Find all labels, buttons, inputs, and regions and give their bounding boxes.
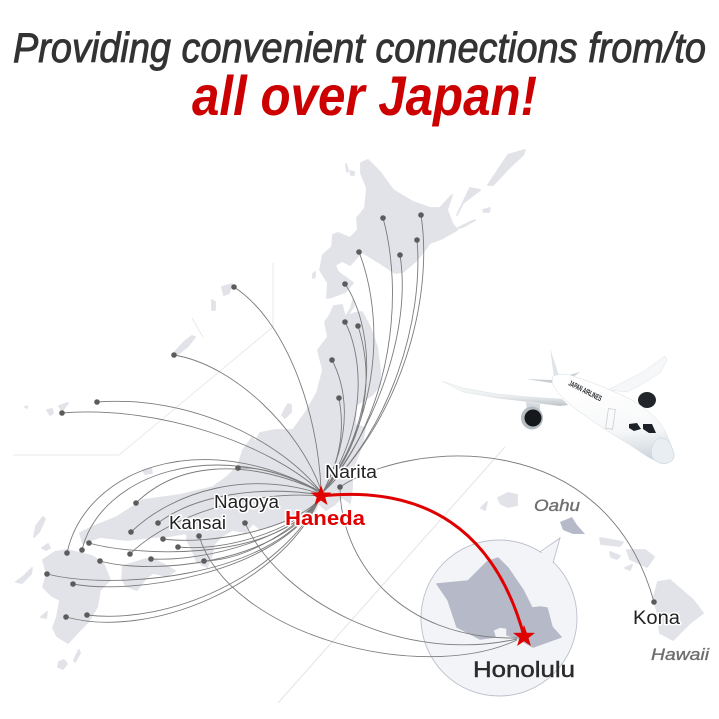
Kyushu bbox=[43, 550, 110, 643]
vertical tail bbox=[550, 348, 559, 378]
Kauai bbox=[498, 493, 517, 507]
label: Kansai: Kansai bbox=[169, 513, 226, 533]
nose cone bbox=[651, 438, 674, 464]
fuselage bbox=[552, 374, 674, 464]
airplane bbox=[442, 348, 674, 464]
Niihau bbox=[481, 502, 487, 510]
Kuril islands bbox=[456, 150, 525, 229]
far engine bbox=[638, 392, 656, 408]
near wing bbox=[442, 381, 568, 406]
far wing bbox=[608, 356, 667, 392]
small islands bbox=[16, 272, 315, 669]
door bbox=[606, 409, 615, 429]
label: Oahu: Oahu bbox=[534, 497, 580, 515]
Honshu bbox=[80, 300, 380, 567]
label: Honolulu: Honolulu bbox=[473, 657, 575, 682]
title bbox=[13, 24, 706, 127]
near engine bbox=[521, 406, 543, 430]
route arcs bbox=[47, 215, 654, 657]
star: Honolulu bbox=[513, 625, 535, 646]
Rishiri and Rebun bbox=[346, 164, 354, 175]
engine pylon bbox=[526, 402, 540, 412]
engine intake bbox=[524, 410, 542, 426]
Big Island bbox=[653, 580, 703, 640]
Shikoku bbox=[122, 558, 175, 590]
Lanai bbox=[610, 552, 620, 559]
map: Japan bbox=[16, 150, 525, 669]
title line 2: all over Japan! bbox=[192, 64, 537, 127]
horizontal stabilizers bbox=[526, 372, 580, 383]
Hokkaido bbox=[320, 160, 457, 298]
cockpit windows bbox=[629, 423, 656, 433]
Molokai bbox=[600, 538, 623, 546]
labels bbox=[169, 462, 711, 682]
Oahu enlarged bbox=[437, 558, 561, 647]
label: Haneda: Haneda bbox=[285, 507, 366, 530]
Oahu callout bubble bbox=[421, 538, 577, 696]
Maui bbox=[627, 550, 654, 567]
Oahu small island bbox=[560, 517, 585, 534]
label: Nagoya: Nagoya bbox=[214, 492, 280, 512]
map: Hawaiian islands bbox=[481, 493, 703, 640]
label: Kona: Kona bbox=[633, 608, 680, 629]
label: Narita: Narita bbox=[325, 462, 378, 482]
airport dots bbox=[44, 212, 657, 620]
label: Hawaii: Hawaii bbox=[651, 646, 711, 664]
Kahoolawe bbox=[625, 565, 632, 570]
Haneda to Honolulu red route bbox=[321, 494, 524, 636]
star: Haneda bbox=[310, 485, 332, 505]
airline name: JAPAN AIRLINES bbox=[567, 379, 604, 403]
